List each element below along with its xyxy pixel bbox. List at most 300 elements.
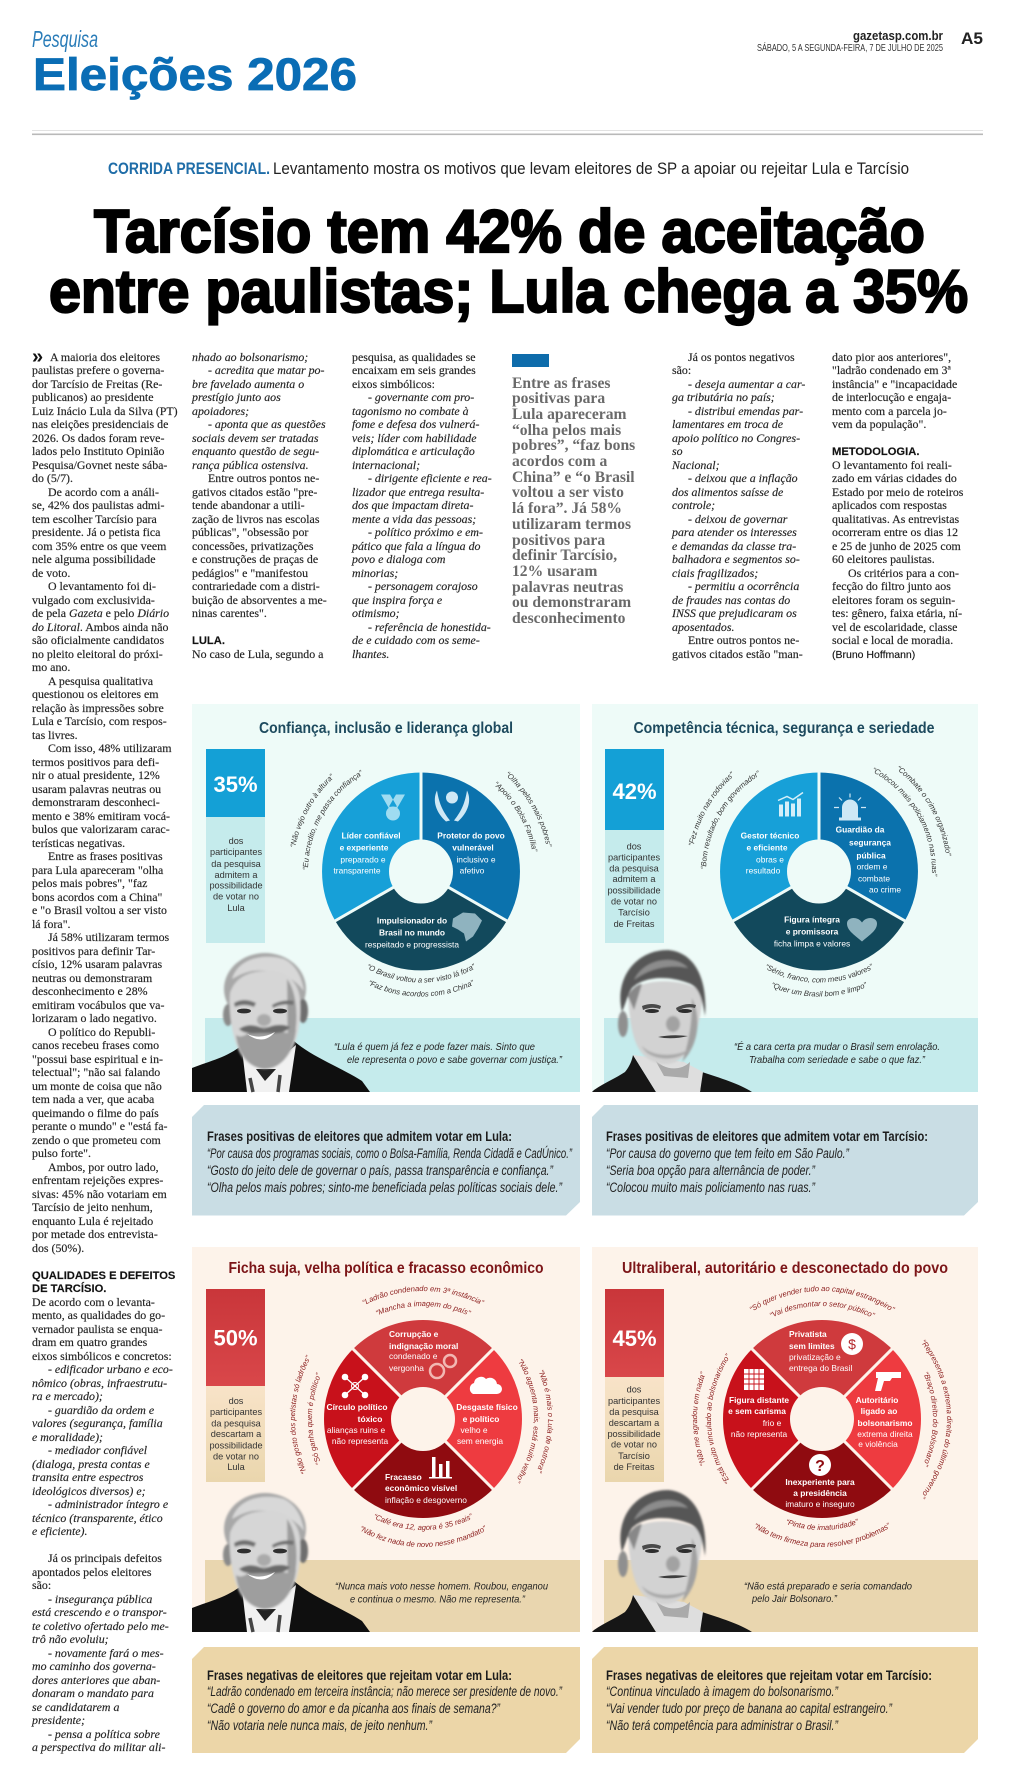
text column 5: vel de escolaridade, classe: [832, 620, 957, 634]
quote: [734, 1040, 940, 1066]
icon: handcuffs: [430, 1355, 456, 1378]
pull quote: palavras neutras: [512, 579, 623, 596]
panel: Lula negative phrases: [192, 1647, 580, 1753]
donut chart: Tarcísio defects: a presidência: [793, 1488, 847, 1498]
text column 5: (Bruno Hoffmann): [832, 648, 915, 660]
text column 3: pático que fala a língua do: [352, 538, 480, 552]
donut chart: Lula qualities: respeitado e progressista: [365, 940, 459, 950]
text column 1: são oficialmente candidatos: [32, 633, 164, 647]
text column 1: para Lula apareceram "olha: [32, 862, 163, 876]
text column 3: que inspira força e: [352, 592, 442, 606]
donut chart: Lula defects: Círculo político: [327, 1402, 387, 1412]
text column 1: de pela Gazeta e pelo Diário: [32, 606, 169, 620]
stat: 42%: possibilidade: [607, 886, 661, 896]
icon: bar chart: [429, 1457, 452, 1478]
text column 4: apoio político no Congres-: [672, 430, 800, 444]
pull quote: utilizaram termos: [512, 516, 631, 533]
text column 1: usaram palavras neutras ou: [32, 782, 161, 796]
text column 2: rança pública ostensiva.: [192, 458, 309, 472]
icon: pistol: [875, 1372, 901, 1391]
icon: Brazil map: [452, 912, 482, 942]
text column 1: está crescendo e o transpor-: [32, 1605, 167, 1619]
donut chart: Tarcísio defects: e violência: [858, 1439, 898, 1449]
pull quote: 12% usaram: [512, 563, 597, 580]
donut chart: Tarcísio defects: “Só quer vender tudo ao capital estrangeiro”: [750, 1286, 896, 1310]
text column 1: positivos para definir Tar-: [32, 944, 155, 958]
donut chart: Lula qualities: e experiente: [340, 842, 389, 852]
stat: 50%: participantes: [210, 1407, 262, 1417]
text column 1: enquanto Lula é rejeitado: [32, 1214, 153, 1228]
stat: 42%: admitem a: [613, 874, 656, 884]
donut chart: Lula defects: alianças ruins e: [327, 1425, 385, 1435]
text column 1: vulgado com exclusivida-: [32, 592, 155, 606]
stat: 45%: dos: [627, 1385, 642, 1395]
donut chart: Tarcísio defects: “Não me agradou em nada”: [692, 1371, 705, 1466]
pull quote: definir Tarcísio,: [512, 547, 617, 564]
text column 5: aplicados com respostas: [832, 498, 947, 512]
text column 1: - pensa a política sobre: [48, 1726, 160, 1740]
text column 1: QUALIDADES E DEFEITOS: [32, 1270, 175, 1282]
donut chart: Lula defects: inflação e desgoverno: [385, 1495, 467, 1505]
pull quote: Lula apareceram: [512, 406, 626, 423]
text column 1: emitiram vocábulos que va-: [32, 998, 164, 1012]
text column 1: "possui base espiritual e in-: [32, 1052, 163, 1066]
donut chart: Lula qualities: transparente: [333, 866, 381, 876]
donut chart: Lula qualities: Brasil no mundo: [379, 928, 445, 938]
text column 5: ocorreram entre os dias 12: [832, 525, 958, 539]
text column 1: se, 42% dos paulistas admi-: [32, 498, 164, 512]
donut chart: Lula defects: sem energia: [457, 1436, 503, 1446]
panel: Tarcísio negative phrases: “Não terá competência para administrar o Brasil.”: [606, 1718, 838, 1733]
text column 2: contrariedade com a distri-: [192, 579, 320, 593]
text column 1: mento e 38% emitiram vocá-: [32, 808, 170, 822]
donut chart: Lula defects: tóxico: [358, 1414, 382, 1424]
text column 3: lhantes.: [352, 646, 389, 660]
text column 2: prestígio junto aos: [192, 390, 281, 404]
donut chart: Lula qualities: “Eu acredito, me passa confiança”: [302, 770, 362, 870]
pull quote: lá fora”. Já 58%: [512, 500, 622, 517]
stat: 35%: de votar no: [213, 892, 259, 902]
donut chart: Lula qualities: Protetor do povo: [437, 830, 505, 840]
donut chart: Tarcísio qualities: Guardião da: [836, 824, 885, 834]
text column 4: ga tributária no país;: [672, 390, 775, 404]
text column 1: por metade dos entrevista-: [32, 1227, 158, 1241]
text column 1: e eficiente).: [32, 1524, 87, 1538]
panel: Lula positive phrases: [192, 1105, 580, 1216]
quote: “Lula é quem já fez e pode fazer mais. Sinto que: [334, 1041, 535, 1053]
panel: Lula positive phrases: “Por causa dos programas sociais, como o Bolsa-Família, Renda Cidadã e CadÚnico.”: [207, 1146, 572, 1161]
text column 1: trô não evoluiu;: [32, 1632, 109, 1646]
donut chart: Lula qualities: “Faz bons acordos com a China”: [370, 980, 473, 996]
donut chart: Tarcísio defects: “Está muito vinculado ao bolsonarismo”: [706, 1353, 729, 1484]
text column 4: e demandas da classe tra-: [672, 538, 796, 552]
icon: dollar: [841, 1333, 863, 1355]
donut chart: Tarcísio qualities: Gestor técnico: [741, 830, 799, 840]
text column 3: encaixam em seis grandes: [352, 363, 476, 377]
text column 1: Entre as frases positivas: [48, 849, 163, 863]
donut chart: Tarcísio qualities: “Colocou mais policiamento nas ruas”: [874, 768, 938, 876]
text column 1: ideológicos diversos) e;: [32, 1484, 146, 1498]
quote: [744, 1580, 912, 1605]
panel: Tarcísio negative phrases: [592, 1647, 978, 1753]
stat: 42%: de Freitas: [614, 919, 655, 929]
donut chart: Lula qualities: Líder confiável: [341, 830, 401, 840]
donut chart: Tarcísio qualities: resultado: [746, 866, 781, 876]
stat: 35%: admitem a: [215, 870, 258, 880]
stat: 50%: de votar no: [213, 1452, 259, 1462]
icon: cloud: [470, 1377, 502, 1394]
text column 3: mente a vida das pessoas;: [352, 512, 476, 526]
icon: network: [342, 1374, 368, 1398]
text column 4: são:: [672, 363, 691, 377]
text column 3: pesquisa, as qualidades se: [352, 350, 476, 364]
text column 3: - referência de honestida-: [368, 620, 491, 634]
text column 1: O político do Republi-: [48, 1024, 155, 1038]
text column 1: nir o atual presidente, 12%: [32, 768, 160, 782]
panel: Lula negative phrases: “Cadê o governo do amor e da picanha aos finais de semana?”: [207, 1701, 500, 1716]
page number: A5: [961, 29, 983, 48]
donut chart: Tarcísio qualities: e promissora: [786, 926, 839, 936]
stat: 45%: Tarcísio: [618, 1451, 650, 1461]
donut chart: Lula qualities: inclusivo e: [456, 854, 496, 864]
stat: 50%: da pesquisa: [211, 1418, 262, 1428]
stat: 42%: da pesquisa: [609, 864, 660, 874]
donut chart: Tarcísio defects: bolsonarismo: [858, 1418, 912, 1428]
text column 5: O levantamento foi reali-: [832, 458, 952, 472]
donut chart: Tarcísio defects: privatização e: [789, 1352, 841, 1362]
text column 4: aposentados.: [672, 620, 734, 634]
donut chart: Lula defects: Desgaste físico: [456, 1402, 518, 1412]
icon: growth bars: [778, 792, 803, 816]
text column 4: - deixou que a inflação: [688, 471, 798, 485]
donut chart: Tarcísio defects: “Não tem firmeza para resolver problemas”: [756, 1522, 889, 1548]
text column 1: relação às impressões sobre: [32, 700, 164, 714]
text column 3: fome e defesa dos vulnerá-: [352, 417, 479, 431]
text column 1: dores anteriores que aban-: [32, 1672, 160, 1686]
donut chart: Tarcísio defects: imaturo e inseguro: [785, 1499, 855, 1509]
text column 5: vem da população".: [832, 417, 926, 431]
text column 1: no pleito eleitoral do próxi-: [32, 646, 163, 660]
donut chart: Lula qualities: “O Brasil voltou a ser visto lá fora”: [368, 963, 474, 983]
donut chart: Tarcísio defects: entrega do Brasil: [789, 1363, 852, 1373]
text column 5: Estado por meio de roteiros: [832, 484, 963, 498]
donut chart: Tarcísio qualities: “Quer um Brasil bom e limpo”: [772, 982, 866, 997]
text column 1: donaram o mandato para: [32, 1686, 154, 1700]
donut chart: Tarcísio defects: extrema direita: [857, 1429, 913, 1439]
text column 3: minorias;: [352, 566, 398, 580]
stat: 45%: participantes: [608, 1396, 660, 1406]
text column 5: [832, 350, 963, 660]
text column 1: nas eleições presidenciais de: [32, 417, 168, 431]
text column 1: Já os principais defeitos: [48, 1551, 162, 1565]
text column 3: - dirigente eficiente e rea-: [368, 471, 492, 485]
text column 1: A pesquisa qualitativa: [48, 674, 153, 688]
donut chart: Tarcísio qualities: pública: [856, 850, 886, 860]
donut chart: Lula defects: “Ladrão condenado em 3ª instância”: [362, 1286, 485, 1304]
text column 1: do (5/7).: [32, 471, 73, 485]
text column 4: Entre outros pontos ne-: [688, 633, 799, 647]
text column 1: mento, as qualidades do go-: [32, 1308, 165, 1322]
stat: 35%: Lula: [227, 903, 246, 913]
text column 3: - governante com pro-: [368, 390, 474, 404]
text column 1: Lula e Tarcísio, com respos-: [32, 714, 167, 728]
text column 5: social e local de moradia.: [832, 633, 953, 647]
text column 1: - administrador íntegro e: [48, 1497, 168, 1511]
donut chart: Tarcísio qualities: ficha limpa e valores: [774, 938, 850, 948]
icon: building grid: [744, 1369, 764, 1390]
donut chart: Lula defects: vergonha: [389, 1363, 424, 1373]
text column 1: mo caminho dos governa-: [32, 1659, 156, 1673]
text column 1: dram em quatro grandes: [32, 1335, 147, 1349]
text column 2: concessões, privatizações: [192, 538, 314, 552]
donut chart: Tarcísio qualities: ordem e: [857, 862, 888, 872]
text column 1: mo ano.: [32, 660, 70, 674]
pull quote accent bar: [512, 354, 549, 367]
text column 1: De acordo com o levanta-: [32, 1294, 155, 1308]
photo: Tarcísio: [592, 950, 752, 1092]
photo: Tarcísio: [592, 1490, 752, 1632]
donut chart: Tarcísio defects: Inexperiente para: [785, 1477, 855, 1487]
panel title: Ficha suja, velha política e fracasso econômico: [228, 1260, 544, 1277]
text column 2: - aponta que as questões: [208, 417, 326, 431]
panel: Tarcísio negative phrases: “Vai vender tudo por preço de banana ao capital estrangeiro.”: [606, 1701, 892, 1716]
text column 5: METODOLOGIA.: [832, 446, 919, 458]
text column 2: LULA.: [192, 635, 225, 647]
panel: Tarcísio positive phrases: “Seria boa opção para alternância de poder.”: [606, 1163, 815, 1178]
text column 4: dos alimentos saísse de: [672, 484, 783, 498]
icon: siren: [834, 794, 866, 820]
text column 3: - político próximo e em-: [368, 525, 483, 539]
donut chart: Tarcísio defects: ligado ao: [861, 1406, 897, 1416]
text column 1: questionou os eleitores em: [32, 687, 158, 701]
stat: 50%: possibilidade: [209, 1440, 263, 1450]
website and date: gazetasp.com.br: [853, 29, 943, 43]
panel: Tarcísio positive: [592, 704, 978, 1092]
stat: 42%: Tarcísio: [618, 907, 650, 917]
text column 1: de voto.: [32, 566, 70, 580]
pull quote: positivas para: [512, 390, 605, 407]
text column 1: Com isso, 48% utilizaram: [48, 741, 172, 755]
donut chart: Tarcísio qualities: “Sério, franco, com meus valores”: [766, 964, 872, 983]
pull quote: voltou a ser visto: [512, 484, 624, 501]
donut chart: Tarcísio qualities: “Bom resultado, bom governador”: [700, 770, 758, 869]
icon: protecting hands: [435, 790, 469, 822]
stat: 45%: de votar no: [611, 1440, 657, 1450]
donut chart: Tarcísio qualities: [688, 766, 952, 997]
text column 1: Já 58% utilizaram termos: [48, 930, 169, 944]
text column 5: mento com a parcela jo-: [832, 404, 947, 418]
text column 1: e moralidade);: [32, 1430, 103, 1444]
photo: Lula: [192, 953, 370, 1092]
text column 1: eixos simbólicos e concretos:: [32, 1348, 172, 1362]
icon: dollar: $: [848, 1336, 856, 1352]
text column 4: lamentares em troca de: [672, 417, 783, 431]
pull quote: acordos com a: [512, 453, 607, 470]
icon: heart: [847, 918, 877, 942]
stat: 45%: 45%: [612, 1326, 657, 1351]
text column 5: 60 eleitores paulistas.: [832, 552, 935, 566]
pull quote: Entre as frases: [512, 374, 610, 392]
stat: 50%: [206, 1289, 265, 1482]
panel title: Ultraliberal, autoritário e desconectado do povo: [622, 1260, 948, 1277]
donut chart: Lula defects: [290, 1286, 554, 1547]
stat: 45%: [605, 1289, 664, 1482]
donut chart: Lula defects: econômico visível: [385, 1483, 457, 1493]
text column 1: DE TARCÍSIO.: [32, 1283, 106, 1295]
text column 5: zado em várias cidades do: [832, 471, 957, 485]
text column 1: vernador paulista se enqua-: [32, 1322, 162, 1336]
text column 1: demonstraram desconheci-: [32, 795, 160, 809]
text column 3: - personagem corajoso: [368, 579, 478, 593]
donut chart: Tarcísio qualities: e eficiente: [747, 842, 788, 852]
text column 5: "ladrão condenado em 3ª: [832, 363, 951, 377]
text column 4: balhadora e segmentos so-: [672, 552, 800, 566]
donut chart: Tarcísio defects: “Braço direito do Bolsonaro”: [924, 1372, 938, 1468]
donut chart: Tarcísio qualities: obras e: [756, 854, 784, 864]
text column 1: perante o mundo" e "está fa-: [32, 1119, 168, 1133]
stat: 50%: dos: [229, 1396, 244, 1406]
donut chart: Lula defects: condenado e: [389, 1351, 438, 1361]
text column 2: zação de livros nas escolas: [192, 512, 319, 526]
website and date: [757, 29, 943, 54]
panel: Tarcísio positive phrases: “Colocou muito mais policiamento nas ruas.”: [606, 1180, 815, 1195]
pull quote: China” e “o Brasil: [512, 469, 635, 486]
panel: Lula positive: [192, 704, 580, 1092]
text column 1: Ambos, por outro lado,: [48, 1160, 159, 1174]
stat: 35%: dos: [229, 836, 244, 846]
text column 1: - novamente fará o mes-: [48, 1646, 164, 1660]
text column 1: telectual"; "não sai falando: [32, 1065, 160, 1079]
text column 1: bulos que valorizaram carac-: [32, 822, 170, 836]
stat: 45%: da pesquisa: [609, 1407, 660, 1417]
panel: Lula negative phrases: “Ladrão condenado em terceira instância; não merece ser presidente de novo.”: [207, 1684, 562, 1699]
text column 1: lados pelo Instituto Opinião: [32, 444, 164, 458]
text column 1: terísticas negativas.: [32, 836, 125, 850]
text column 3: povo e dialoga com: [352, 552, 445, 566]
donut chart: Lula defects: “Mancha a imagem do país”: [376, 1300, 472, 1315]
stat: 42%: [605, 749, 664, 943]
text column 2: sociais devem ser tratadas: [192, 430, 318, 444]
text column 1: queimando o filme do país: [32, 1106, 159, 1120]
text column 3: [351, 350, 492, 660]
stat: 50%: Lula: [227, 1462, 246, 1472]
text column 1: do Litoral. Ambos ainda não: [32, 620, 168, 634]
quote: pelo Jair Bolsonaro.”: [751, 1593, 837, 1605]
text column 2: nhado ao bolsonarismo;: [192, 350, 308, 364]
text column 1: ra e mercado);: [32, 1389, 103, 1403]
column opener mark: »: [32, 346, 43, 368]
text column 4: Já os pontos negativos: [688, 350, 795, 364]
text column 1: Luiz Inácio Lula da Silva (PT): [32, 404, 178, 418]
quote: “Nunca mais voto nesse homem. Roubou, enganou: [335, 1580, 548, 1592]
text column 1: paulistas prefere o governa-: [32, 363, 164, 377]
panel: Lula positive phrases: “Gosto do jeito dele de governar o país, passa transparência e confiança.”: [207, 1163, 553, 1178]
text column 2: pedágios" e "manifestou: [192, 566, 308, 580]
pull quote: [512, 374, 635, 627]
text column 4: - distribui emendas par-: [688, 404, 803, 418]
donut chart: Lula defects: “Não é mais o Lula de outrora”: [538, 1370, 554, 1474]
text column 2: públicas", "obsessão por: [192, 525, 308, 539]
text column 4: so: [672, 444, 683, 458]
text column 1: Pesquisa/Govnet neste sába-: [32, 458, 167, 472]
panel: Lula negative phrases: Frases negativas de eleitores que rejeitam votar em Lula:: [207, 1668, 512, 1683]
text column 1: zendo o que prometeu com: [32, 1132, 161, 1146]
pull quote: ou demonstraram: [512, 594, 631, 611]
text column 5: e 25 de junho de 2025 com: [832, 538, 961, 552]
section heading: Eleições 2026: Eleições 2026: [33, 49, 357, 100]
panel: Lula positive phrases: “Olha pelos mais pobres; sinto-me beneficiada pelas políticas sociais dele.”: [207, 1180, 562, 1195]
donut chart: Lula defects: “Não aguenta mais, está muito velho”: [518, 1359, 540, 1484]
text column 2: ninas carentes".: [192, 606, 267, 620]
text column 4: INSS que prejudicaram os: [672, 606, 797, 620]
pull quote: “olha pelos mais: [512, 422, 621, 439]
stat: 50%: 50%: [213, 1326, 258, 1350]
text column 1: 2026. Os dados foram reve-: [32, 430, 164, 444]
text column 1: pelos mais pobres", "faz: [32, 876, 147, 890]
text column 3: eixos simbólicos:: [352, 376, 435, 390]
text column 1: - guardião da ordem e: [48, 1402, 154, 1416]
donut chart: Lula defects: Fracasso: [385, 1472, 422, 1482]
text column 5: dato pior aos anteriores",: [832, 350, 951, 364]
text column 1: apontados pelos eleitores: [32, 1564, 152, 1578]
text column 1: [31, 350, 178, 1754]
panel: Tarcísio negative phrases: “Continua vinculado à imagem do bolsonarismo.”: [606, 1684, 838, 1699]
section label: Pesquisa: Pesquisa: [32, 26, 98, 52]
text column 2: tende abandonar a utili-: [192, 498, 305, 512]
text column 4: para atender os interesses: [672, 525, 797, 539]
icon: question: [809, 1454, 831, 1476]
panel: Tarcísio positive phrases: [592, 1105, 978, 1216]
panel: Lula positive phrases: Frases positivas de eleitores que admitem votar em Lula:: [207, 1129, 512, 1144]
stat: 42%: de votar no: [611, 897, 657, 907]
stat: 45%: descartam a: [609, 1418, 660, 1428]
quote: “É a cara certa pra mudar o Brasil sem enrolação.: [734, 1040, 940, 1053]
donut chart: Lula defects: Corrupção e: [389, 1329, 439, 1339]
text column 1: neutras ou demonstraram: [32, 970, 152, 984]
pull quote: desconhecimento: [512, 610, 625, 627]
text column 4: - deseja aumentar a car-: [688, 376, 805, 390]
subheadline: CORRIDA PRESENCIAL.: [108, 159, 270, 178]
text column 5: Os critérios para a con-: [848, 566, 959, 580]
text column 1: termos positivos para defi-: [32, 754, 159, 768]
donut chart: Lula defects: “Não fez nada de novo nesse mandato”: [361, 1525, 485, 1547]
pull quote: pobres”, “faz bons: [512, 437, 635, 454]
text column 2: No caso de Lula, segundo a: [192, 646, 323, 660]
main headline: entre paulistas; Lula chega a 35%: [49, 258, 968, 325]
text column 1: - mediador confiável: [48, 1443, 147, 1457]
text column 2: - acredita que matar po-: [208, 363, 324, 377]
text column 4: gativos citados estão "man-: [672, 646, 803, 660]
text column 1: transita entre espectros: [32, 1470, 143, 1484]
main headline: [49, 198, 968, 325]
text column 1: nele alguma possibilidade: [32, 552, 156, 566]
text column 3: lizador que entrega resulta-: [352, 484, 484, 498]
text column 2: buição de absorventes a me-: [192, 592, 327, 606]
text column 5: de interlocução e engaja-: [832, 390, 951, 404]
donut chart: Tarcísio defects: “Pinta de imaturidade”: [786, 1518, 858, 1530]
donut chart: Tarcísio defects: e sem carisma: [728, 1406, 786, 1416]
text column 2: apoiadores;: [192, 404, 249, 418]
text column 1: enfrentam rejeições expres-: [32, 1173, 163, 1187]
text column 2: bre favelado aumenta o: [192, 376, 304, 390]
stat: 45%: possibilidade: [607, 1429, 661, 1439]
donut chart: Tarcísio qualities: “Combate o crime organizado”: [898, 766, 952, 856]
stat: 42%: participantes: [608, 853, 660, 863]
text column 4: [671, 350, 805, 661]
text column 4: Nacional;: [672, 458, 720, 472]
stat: 35%: possibilidade: [209, 880, 263, 890]
text column 1: se candidatarem a: [32, 1700, 119, 1714]
